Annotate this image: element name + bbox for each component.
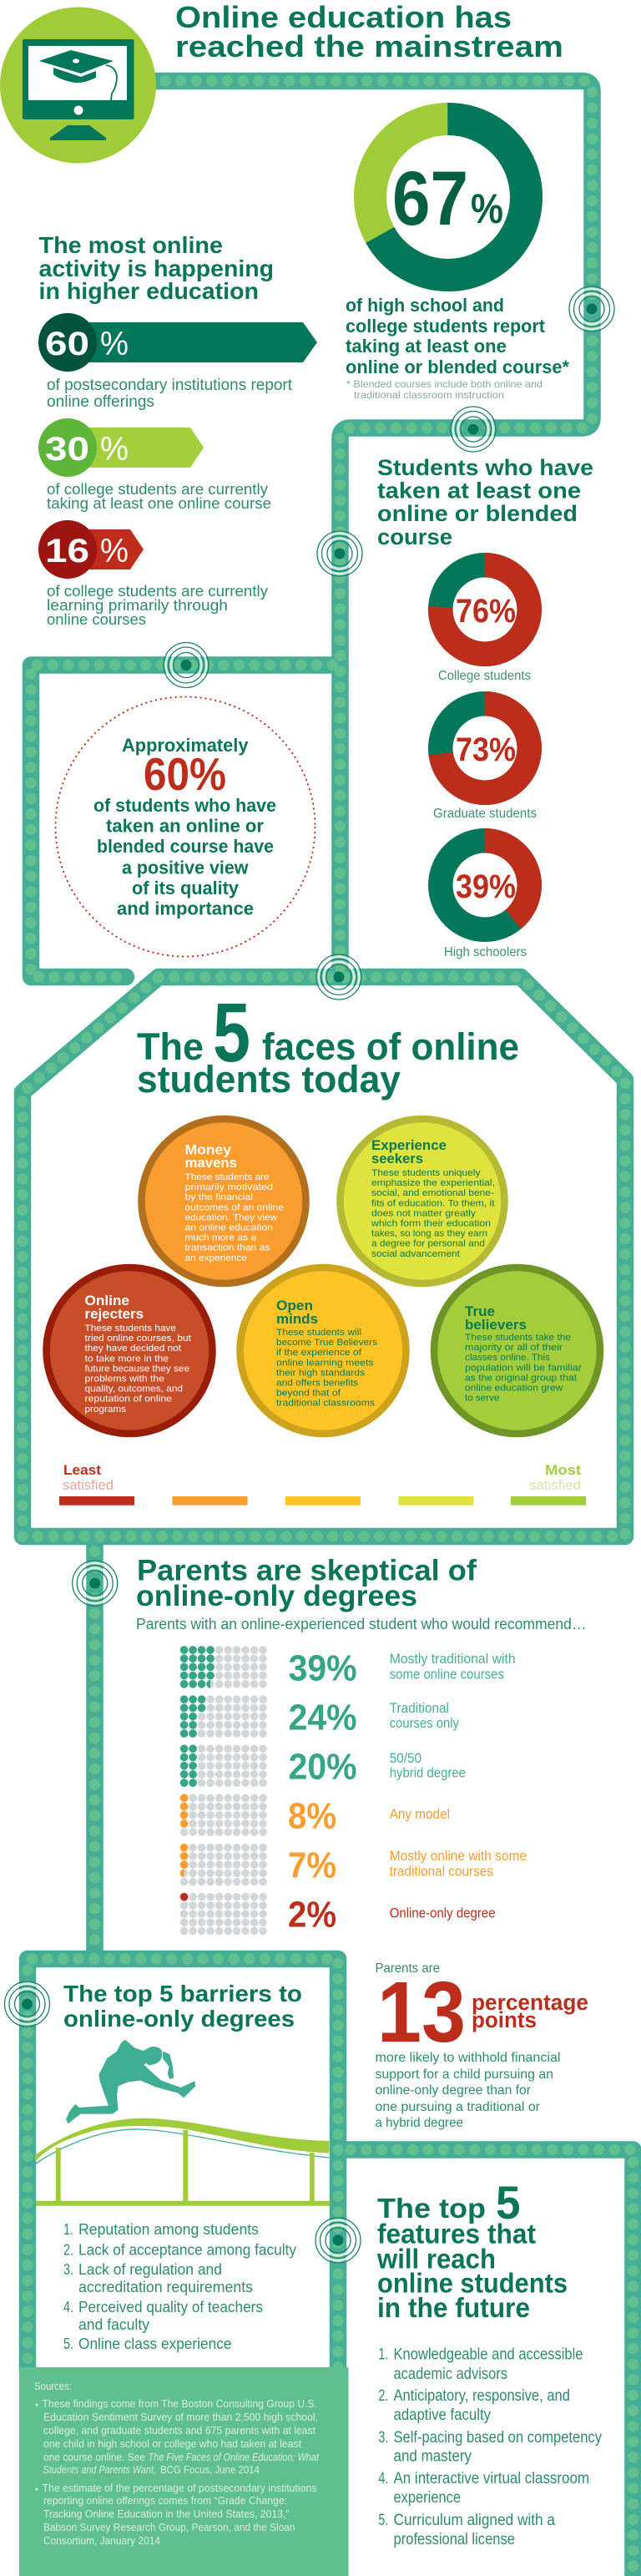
- arrow stat: 60%: [38, 313, 317, 372]
- callout: approximately 60% dotted circle: blended course have: [97, 836, 274, 857]
- list: barriers: and faculty: [78, 2315, 150, 2333]
- legend: satisfaction scale: satisfied: [63, 1477, 114, 1493]
- list: features: 2.: [378, 2386, 388, 2405]
- panel: sources: These findings come from The Boston Consulting Group U.S.: [42, 2398, 317, 2410]
- list: barriers: 2.: [63, 2241, 73, 2259]
- list: features: professional license: [394, 2530, 515, 2548]
- circle: money mavens: outcomes of an online: [185, 1202, 284, 1212]
- circle: experience seekers: social, and emotional bene-: [371, 1188, 494, 1198]
- circle: true believers: True: [465, 1303, 495, 1319]
- text: 60% description: [47, 376, 293, 411]
- donut chart: college students 76%: College students: [438, 669, 531, 683]
- heading: students who have taken: taken at least one: [377, 478, 581, 503]
- arrow stat: 16%: 16: [45, 533, 89, 569]
- panel: sources: Students and Parents Want,: [43, 2464, 156, 2476]
- circle: online rejecters: problems with the: [85, 1374, 164, 1384]
- circle: money mavens: much more as a: [185, 1233, 257, 1243]
- heading: top 5 features: will reach: [376, 2244, 496, 2275]
- title: [175, 0, 563, 63]
- circle: money mavens: primarily motivated: [185, 1182, 273, 1192]
- circle: open minds: These students will: [276, 1328, 361, 1338]
- callout: approximately 60% dotted circle: [55, 696, 315, 957]
- circle: open minds: traditional classrooms: [276, 1399, 375, 1409]
- list: barriers: Lack of acceptance among faculty: [78, 2241, 297, 2259]
- text: 16% description: of college students are currently: [47, 582, 269, 600]
- callout: 13 percentage points: [376, 1961, 588, 2130]
- circle: online rejecters: These students have: [85, 1323, 176, 1334]
- dot chart row: 2%: Online-only degree: [390, 1906, 496, 1921]
- dot chart row: 2%: 2%: [288, 1895, 336, 1936]
- list: barriers: [63, 2220, 297, 2352]
- circle: experience seekers: which form their education: [371, 1219, 491, 1229]
- circle: money mavens: mavens: [185, 1155, 237, 1171]
- circle: money mavens: education. They view: [185, 1212, 278, 1222]
- circle: money mavens: an experience: [185, 1253, 247, 1263]
- dot chart row: 20%: [179, 1744, 466, 1788]
- list: features: 3.: [378, 2428, 388, 2447]
- list: features: Anticipatory, responsive, and: [394, 2386, 570, 2405]
- heading: higher education: activity is happening: [38, 256, 274, 281]
- circle: open minds: beyond that of: [276, 1389, 341, 1399]
- subheading: Parents with an online-experienced student who would recommend…: [136, 1616, 586, 1632]
- donut chart: high schoolers 39%: High schoolers: [444, 945, 527, 959]
- heading: students who have taken: [377, 455, 593, 549]
- list: features: academic advisors: [394, 2365, 507, 2383]
- heading: top 5 features: [376, 2176, 568, 2323]
- icon: monitor with graduation cap: [0, 7, 156, 164]
- circle: money mavens: an online education: [185, 1222, 273, 1232]
- list: barriers: 4.: [63, 2298, 73, 2315]
- circle: money mavens: Money: [185, 1142, 232, 1158]
- dot chart row: 39%: Mostly traditional with: [390, 1652, 516, 1667]
- text: 16% description: online courses: [47, 610, 146, 628]
- list: features: Knowledgeable and accessible: [394, 2346, 583, 2364]
- circle: experience seekers: Experience: [371, 1137, 447, 1153]
- dot chart row: 39%: [179, 1646, 516, 1689]
- heading: top 5 barriers: online-only degrees: [63, 2006, 295, 2032]
- donut chart: college students 76%: [438, 565, 531, 683]
- circle: true believers: to serve: [465, 1394, 499, 1404]
- heading: top 5 features: online students: [377, 2268, 568, 2299]
- legend: satisfaction scale: Most: [545, 1462, 581, 1478]
- arrow stat: 60%: 60: [45, 326, 89, 362]
- legend: satisfaction scale: [59, 1462, 586, 1506]
- text: 67% description: of high school and: [346, 295, 504, 316]
- heading: the 5 faces of online students today: faces of online: [262, 1025, 519, 1068]
- callout: approximately 60% dotted circle: Approximately: [122, 735, 249, 756]
- heading: higher education: [38, 232, 274, 304]
- circle: money mavens: These students are: [185, 1172, 269, 1182]
- donut chart: graduate students 73%: [433, 704, 537, 821]
- dot chart row: 24%: courses only: [390, 1716, 460, 1731]
- text: 67% description: online or blended course*: [346, 357, 569, 377]
- callout: approximately 60% dotted circle: of students who have: [93, 795, 276, 816]
- circle: true believers: These students take the: [465, 1333, 571, 1343]
- panel: sources: The Five Faces of Online Education: What: [149, 2452, 319, 2463]
- heading: students who have taken: course: [377, 524, 452, 549]
- heading: higher education: in higher education: [38, 278, 259, 304]
- legend: satisfaction scale: Least: [63, 1462, 101, 1478]
- text: 16% description: [47, 582, 269, 628]
- list: features: 4.: [378, 2469, 388, 2487]
- list: barriers: accreditation requirements: [78, 2278, 253, 2295]
- text: 30% description: taking at least one online course: [47, 494, 271, 512]
- arrow stat: 30%: [38, 418, 204, 477]
- circle: money mavens: transaction than as: [185, 1243, 270, 1253]
- donut chart: 67%: %: [471, 185, 503, 232]
- callout: approximately 60% dotted circle: 60%: [144, 748, 226, 800]
- heading: students who have taken: online or blended: [377, 501, 578, 526]
- legend: satisfaction scale: satisfied: [529, 1477, 581, 1493]
- circle: open minds: [240, 1268, 406, 1434]
- circle: experience seekers: [341, 1119, 504, 1283]
- list: barriers: 1.: [63, 2220, 73, 2238]
- callout: approximately 60% dotted circle: taken an online or: [106, 815, 264, 837]
- callout: 13 percentage points: more likely to withhold financial: [376, 2051, 561, 2065]
- panel: sources: [19, 2367, 349, 2576]
- donut chart: graduate students 73%: Graduate students: [433, 807, 537, 821]
- panel: sources: Education Sentiment Survey of more than 2,500 high school,: [43, 2412, 318, 2423]
- dot chart row: 24%: [179, 1695, 460, 1738]
- title: reached the mainstream: [175, 29, 563, 63]
- heading: the 5 faces of online students today: 5: [213, 986, 250, 1080]
- circle: experience seekers: takes, so long as they earn: [371, 1229, 487, 1239]
- list: barriers: 5.: [63, 2335, 73, 2352]
- circle: open minds: minds: [276, 1311, 318, 1327]
- circle: open minds: their high standards: [276, 1368, 365, 1378]
- heading: the 5 faces of online students today: The: [137, 1025, 204, 1068]
- panel: sources: Tracking Online Education in the United States, 2013,”: [43, 2508, 289, 2520]
- circle: online rejecters: quality, outcomes, and: [85, 1384, 183, 1394]
- markers: concentric target nodes on tube: [5, 286, 614, 2263]
- circle: true believers: as the original group that: [465, 1373, 578, 1383]
- circle: experience seekers: These students uniquely: [371, 1168, 481, 1178]
- heading: top 5 features: 5: [496, 2176, 521, 2229]
- callout: approximately 60% dotted circle: of its quality: [132, 878, 240, 898]
- panel: sources: reporting online offerings comes from “Grade Change:: [43, 2495, 287, 2507]
- circle: online rejecters: programs: [85, 1404, 126, 1415]
- circle: open minds: online learning meets: [276, 1358, 374, 1368]
- circle: online rejecters: rejecters: [85, 1306, 144, 1322]
- arrow stat: 60%: %: [100, 326, 129, 362]
- dot chart row: 24%: Traditional: [390, 1701, 449, 1716]
- callout: 13 percentage points: online-only degree than for: [376, 2083, 532, 2098]
- circle: open minds: and offers benefits: [276, 1378, 358, 1388]
- text: 67% description: college students report: [346, 316, 546, 337]
- circle: experience seekers: fits of education. To them, it: [371, 1198, 496, 1208]
- dot chart row: 39%: some online courses: [390, 1668, 504, 1683]
- donut chart: college students 76%: 76%: [456, 593, 516, 630]
- footnote: traditional classroom instruction: [354, 389, 504, 401]
- arrow stat: 16%: %: [100, 533, 129, 569]
- callout: 13 percentage points: Parents are: [376, 1961, 440, 1976]
- list: features: 1.: [378, 2346, 388, 2364]
- circle: open minds: if the experience of: [276, 1348, 362, 1358]
- panel: sources: BCG Focus, June 2014: [160, 2464, 260, 2476]
- callout: 13 percentage points: a hybrid degree: [376, 2116, 463, 2130]
- circle: experience seekers: a degree for personal and: [371, 1239, 485, 1249]
- dot chart row: 20%: 50/50: [390, 1751, 421, 1766]
- list: barriers: Perceived quality of teachers: [78, 2298, 263, 2315]
- circle: true believers: majority or all of their: [465, 1343, 563, 1353]
- text: 67% description: taking at least one: [346, 336, 507, 357]
- donut chart: graduate students 73%: 73%: [456, 731, 516, 768]
- circle: open minds: Open: [276, 1298, 313, 1313]
- dot chart row: 39%: 39%: [289, 1648, 357, 1689]
- circle: experience seekers: does not matter greatly: [371, 1208, 476, 1218]
- callout: 13 percentage points: percentage: [472, 1990, 588, 2015]
- panel: sources: The estimate of the percentage of postsecondary institutions: [42, 2482, 317, 2494]
- panel: sources: Consortium, January 2014: [43, 2535, 160, 2547]
- circle: experience seekers: emphasize the experiential,: [371, 1178, 495, 1188]
- circle: true believers: population will be familiar: [465, 1363, 582, 1373]
- circle: experience seekers: social advancement: [371, 1249, 461, 1259]
- donut chart: high schoolers 39%: 39%: [456, 868, 516, 905]
- footnote: * Blended courses include both online and: [346, 378, 543, 390]
- text: 67% description: [346, 295, 569, 377]
- heading: the 5 faces of online students today: [137, 986, 519, 1101]
- dot chart row: 7%: Mostly online with some: [390, 1849, 527, 1864]
- heading: the 5 faces of online students today: students today: [137, 1058, 401, 1101]
- circle: money mavens: by the financial: [185, 1192, 253, 1202]
- circle: money mavens: [142, 1119, 305, 1283]
- heading: parents are skeptical: online-only degrees: [136, 1580, 417, 1612]
- text: 60% description: online offerings: [47, 392, 154, 411]
- heading: top 5 features: in the future: [377, 2292, 530, 2323]
- list: features: 5.: [378, 2511, 388, 2529]
- circle: online rejecters: [47, 1268, 212, 1434]
- list: features: Self-pacing based on competency: [394, 2428, 602, 2447]
- arrow stat: 16%: [38, 520, 144, 579]
- circle: online rejecters: to take more in the: [85, 1354, 169, 1364]
- heading: top 5 features: The top: [377, 2193, 486, 2224]
- heading: top 5 barriers: [63, 1981, 302, 2032]
- heading: parents are skeptical: [136, 1555, 477, 1612]
- dot chart row: 8%: Any model: [390, 1807, 450, 1822]
- dot chart row: 24%: 24%: [289, 1698, 357, 1738]
- list: features: adaptive faculty: [394, 2406, 491, 2424]
- callout: approximately 60% dotted circle: a positive view: [122, 857, 249, 878]
- callout: approximately 60% dotted circle: and importance: [117, 898, 254, 919]
- list: features: [378, 2346, 602, 2548]
- donut chart: 67%: 67: [392, 156, 468, 241]
- circle: true believers: online education grew: [465, 1383, 563, 1393]
- icon: hurdler jumping over hurdle: [35, 2040, 330, 2206]
- heading: parents are skeptical: Parents are skeptical of: [137, 1555, 477, 1587]
- heading: top 5 features: features that: [377, 2219, 536, 2250]
- text: 60% description: of postsecondary institutions report: [47, 376, 293, 394]
- list: features: and mastery: [394, 2447, 472, 2466]
- list: barriers: Lack of regulation and: [78, 2260, 222, 2278]
- arrow stat: 30%: %: [100, 431, 129, 468]
- heading: higher education: The most online: [38, 232, 223, 258]
- text: 16% description: learning primarily through: [47, 596, 228, 614]
- text: 30% description: of college students are currently: [47, 480, 269, 498]
- title: Online education has: [175, 0, 512, 34]
- arrow stat: 30%: 30: [45, 431, 89, 468]
- heading: top 5 barriers: The top 5 barriers to: [63, 1981, 302, 2007]
- list: features: Curriculum aligned with a: [394, 2511, 555, 2529]
- callout: 13 percentage points: 13: [377, 1964, 466, 2060]
- panel: sources: Sources:: [34, 2381, 72, 2392]
- circle: open minds: become True Believers: [276, 1338, 377, 1348]
- list: features: An interactive virtual classroom: [394, 2469, 589, 2487]
- dot chart row: 20%: 20%: [289, 1747, 357, 1788]
- panel: sources: college, and graduate students and 675 parents with at least: [43, 2425, 316, 2437]
- circle: online rejecters: they have decided not: [85, 1344, 182, 1354]
- dot chart row: 7%: traditional courses: [390, 1865, 493, 1880]
- circle: experience seekers: seekers: [371, 1151, 423, 1167]
- dot chart row: 2%: [179, 1893, 496, 1936]
- panel: sources: Babson Survey Research Group, Pearson, and the Sloan: [43, 2522, 295, 2533]
- callout: 13 percentage points: one pursuing a traditional or: [376, 2100, 541, 2114]
- circle: true believers: classes online. This: [465, 1353, 550, 1363]
- circle: true believers: [434, 1268, 600, 1434]
- circle: online rejecters: future because they see: [85, 1364, 189, 1374]
- dot chart row: 7%: [179, 1844, 527, 1886]
- footnote: [346, 378, 543, 401]
- circle: online rejecters: tried online courses, but: [85, 1334, 192, 1344]
- panel: sources: one course online. See: [43, 2452, 145, 2463]
- list: features: experience: [394, 2488, 461, 2507]
- dot chart row: 7%: 7%: [288, 1845, 336, 1886]
- donut chart: high schoolers 39%: [441, 841, 529, 959]
- heading: students who have taken: Students who have: [377, 455, 593, 480]
- callout: 13 percentage points: points: [472, 2007, 537, 2032]
- circle: online rejecters: Online: [85, 1293, 129, 1308]
- dot chart row: 8%: [179, 1794, 450, 1837]
- circle: online rejecters: reputation of online: [85, 1394, 172, 1404]
- list: barriers: 3.: [63, 2260, 73, 2278]
- dot chart row: 8%: 8%: [288, 1796, 336, 1837]
- panel: sources: one child in high school or college who had taken at least: [43, 2438, 302, 2450]
- callout: 13 percentage points: support for a child pursuing an: [376, 2067, 553, 2082]
- list: barriers: Reputation among students: [78, 2220, 259, 2238]
- text: 30% description: [47, 480, 271, 512]
- dot chart row: 20%: hybrid degree: [390, 1766, 466, 1781]
- donut chart: 67%: [371, 119, 526, 276]
- list: barriers: Online class experience: [78, 2335, 232, 2352]
- circle: true believers: believers: [465, 1317, 527, 1333]
